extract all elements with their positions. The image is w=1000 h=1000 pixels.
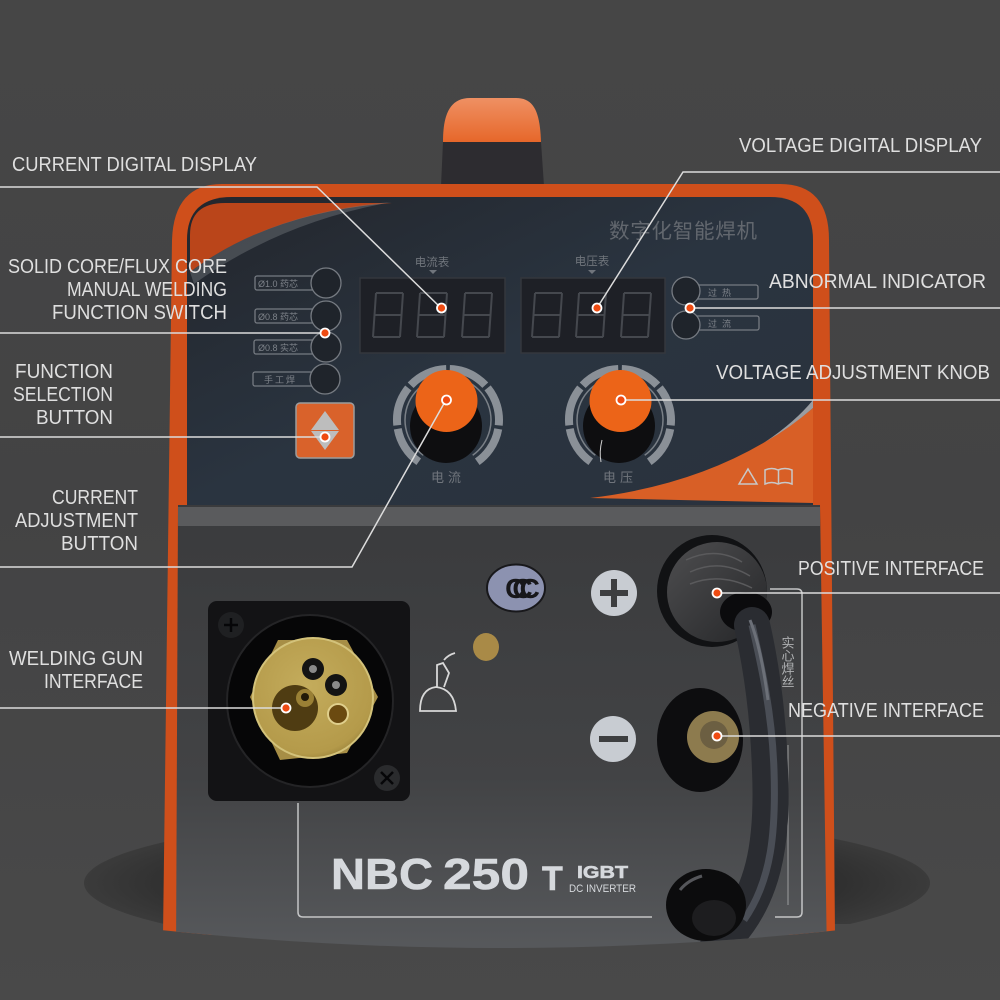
label: function switch: MANUAL WELDING bbox=[67, 279, 227, 301]
label: welding gun interface bbox=[9, 648, 143, 693]
negative connector bbox=[657, 688, 743, 792]
meter labels: 电压表 bbox=[575, 254, 610, 268]
handle bbox=[441, 98, 544, 186]
plus symbol bbox=[591, 570, 637, 616]
right indicator labels: 过热 bbox=[708, 287, 736, 298]
label: welding gun interface: INTERFACE bbox=[44, 671, 143, 693]
label: current adjustment button: CURRENT bbox=[52, 487, 138, 509]
label: welding gun interface: WELDING GUN bbox=[9, 648, 143, 670]
model name: DC INVERTER bbox=[569, 883, 636, 895]
meter labels: 电流 bbox=[431, 470, 465, 485]
model name bbox=[331, 850, 636, 899]
voltage knob bbox=[549, 349, 691, 491]
orange swoosh bottom right bbox=[590, 408, 813, 503]
label: current adjustment button bbox=[15, 487, 138, 555]
current knob bbox=[377, 349, 519, 491]
model name: IGBT bbox=[577, 862, 628, 882]
bottom connector bbox=[666, 869, 746, 941]
control panel bbox=[187, 197, 813, 505]
label: negative interface: NEGATIVE INTERFACE bbox=[788, 700, 984, 722]
leader lines bbox=[0, 172, 1000, 736]
CCC mark bbox=[487, 564, 545, 612]
orange swoosh top left bbox=[190, 203, 392, 272]
label: function selection button bbox=[13, 361, 113, 429]
meter labels: 电流表 bbox=[415, 255, 450, 269]
icon: welding torch bbox=[420, 653, 456, 711]
left indicator labels: Ø1.0 药芯 bbox=[258, 278, 298, 289]
brass screw bbox=[473, 633, 499, 661]
lower panel bbox=[176, 505, 827, 960]
leader dots bbox=[282, 304, 722, 740]
CCC mark: CCC bbox=[505, 573, 540, 604]
label: function switch bbox=[8, 256, 227, 324]
label: function selection button: FUNCTION bbox=[15, 361, 113, 383]
outline frame bbox=[298, 589, 802, 917]
meter labels: 电压 bbox=[603, 470, 637, 485]
model heading: 数字化智能焊机 bbox=[609, 220, 758, 243]
label: current adjustment button: ADJUSTMENT bbox=[15, 510, 138, 532]
cable bbox=[718, 620, 774, 945]
meter labels bbox=[415, 254, 637, 485]
right indicator labels bbox=[672, 277, 759, 339]
welding gun interface bbox=[208, 601, 410, 801]
left indicator labels: Ø0.8 药芯 bbox=[258, 311, 298, 322]
left indicator labels: Ø0.8 实芯 bbox=[258, 342, 298, 353]
label: function selection button: SELECTION bbox=[13, 384, 113, 406]
voltage display bbox=[521, 278, 665, 353]
left indicator labels bbox=[253, 268, 341, 394]
label: abnormal indicator: ABNORMAL INDICATOR bbox=[769, 271, 986, 293]
warning icons bbox=[739, 468, 792, 484]
positive connector bbox=[657, 535, 772, 647]
model name: T bbox=[542, 860, 563, 898]
label: function switch: FUNCTION SWITCH bbox=[52, 302, 227, 324]
minus symbol bbox=[590, 716, 636, 762]
label: function switch: SOLID CORE/FLUX CORE bbox=[8, 256, 227, 278]
label: current adjustment button: BUTTON bbox=[61, 533, 138, 555]
model name: NBC bbox=[331, 850, 433, 899]
label: voltage digital display: VOLTAGE DIGITAL DISPLAY bbox=[739, 135, 982, 157]
floor shadow bbox=[84, 839, 930, 924]
function selection button bbox=[296, 403, 354, 458]
label: function selection button: BUTTON bbox=[36, 407, 113, 429]
right indicator labels: 过流 bbox=[708, 318, 736, 329]
left indicator labels: 手工焊 bbox=[264, 374, 297, 385]
vertical wire label: 实心焊丝 bbox=[780, 636, 794, 688]
current display bbox=[360, 278, 505, 353]
model name: 250 bbox=[443, 850, 529, 899]
label: current digital display: CURRENT DIGITAL DISPLAY bbox=[12, 154, 257, 176]
welder body bbox=[163, 184, 835, 935]
label: voltage adjustment knob: VOLTAGE ADJUSTMENT KNOB bbox=[716, 362, 990, 384]
